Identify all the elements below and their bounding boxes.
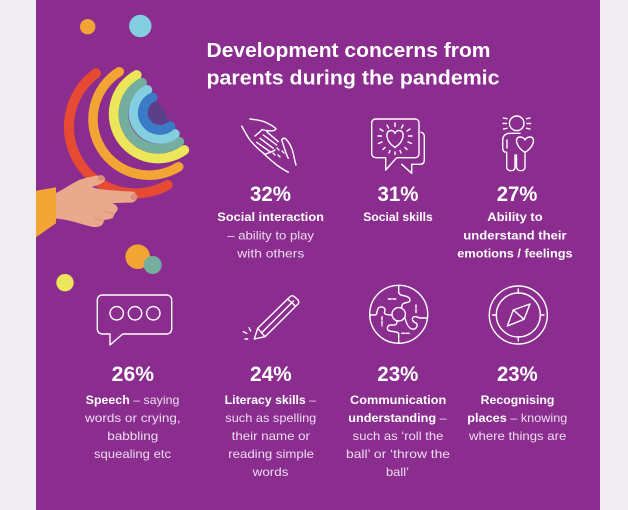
hand — [56, 175, 138, 227]
decorative dot: light blue — [129, 15, 152, 37]
sleeve — [36, 187, 56, 237]
percentage: 27% — [497, 183, 538, 206]
description — [217, 210, 324, 260]
description: ball’ — [386, 465, 409, 479]
percentage: 23% — [497, 363, 538, 386]
description: Recognising — [481, 393, 554, 407]
icon: reaching hands — [242, 119, 296, 172]
panel: emotions — [457, 116, 573, 260]
percentage: 31% — [378, 183, 419, 206]
panel: social skills — [363, 119, 433, 224]
description: such as spelling — [225, 411, 316, 425]
description: such as ‘roll the — [353, 429, 444, 443]
decorative dot: small orange — [80, 19, 95, 34]
description — [467, 393, 567, 443]
description: understand their — [463, 228, 567, 242]
description: Social skills — [363, 210, 433, 224]
title: Development concerns from — [206, 39, 490, 62]
description: emotions / feelings — [457, 246, 573, 260]
description: their name or — [232, 429, 310, 443]
description: Ability to — [487, 210, 543, 224]
icon: compass — [489, 286, 547, 344]
description: Social interaction — [217, 210, 324, 224]
title — [206, 39, 500, 90]
panel: recognising places — [467, 286, 567, 443]
description: words or crying, — [84, 411, 181, 425]
description — [346, 393, 450, 479]
description: with others — [236, 246, 304, 260]
description: reading simple — [228, 447, 314, 461]
description: understanding – — [348, 411, 447, 425]
description: – ability to play — [227, 228, 314, 242]
icon: pencil — [243, 296, 299, 339]
icon: speech bubble with dots — [97, 295, 172, 345]
decorative dot: large orange — [125, 244, 150, 269]
decorative dot: yellow — [56, 274, 74, 291]
percentage: 26% — [112, 363, 154, 386]
description: ball’ or ‘throw the — [346, 447, 450, 461]
description: words — [252, 465, 288, 479]
description: places – knowing — [467, 411, 567, 425]
illustration: rainbow with hand — [36, 15, 184, 291]
decorative dot: teal — [144, 256, 162, 274]
panel: communication understanding — [346, 285, 450, 479]
icon: circular puzzle — [370, 285, 428, 343]
description: babbling — [107, 429, 158, 443]
percentage: 32% — [250, 183, 291, 206]
description — [225, 393, 316, 479]
title: parents during the pandemic — [206, 66, 500, 90]
description: Communication — [350, 393, 446, 407]
icon: person with heart — [503, 116, 533, 171]
rainbow arcs — [69, 72, 184, 193]
panel: speech — [84, 295, 181, 461]
percentage: 24% — [250, 363, 292, 386]
icon: chat bubbles with heart — [372, 119, 424, 173]
description: squealing etc — [94, 447, 171, 461]
description: Speech – saying — [86, 393, 179, 407]
description: Literacy skills – — [225, 393, 316, 407]
description — [457, 210, 573, 260]
panel: social interaction — [217, 119, 324, 260]
description: where things are — [468, 429, 567, 443]
panel: literacy skills — [225, 296, 316, 479]
percentage: 23% — [377, 363, 419, 386]
description — [84, 393, 181, 461]
